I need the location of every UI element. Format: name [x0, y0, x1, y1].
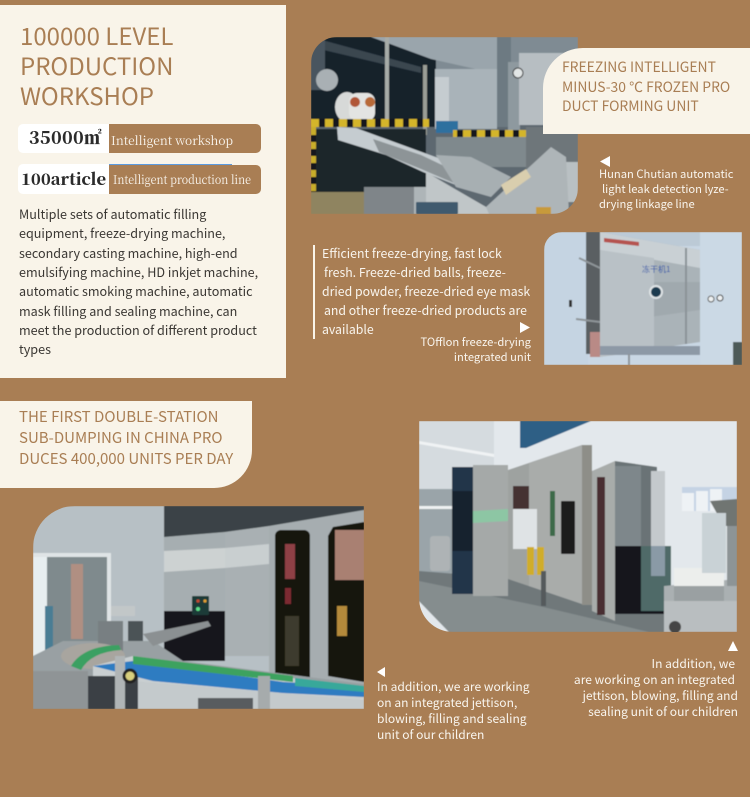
caption: integrated jettison unit right: [574, 655, 738, 720]
text block: efficient freeze-drying: fresh. Freeze-dried balls, freeze-: [324, 263, 506, 281]
caption: integrated jettison unit right: jettison, blowing, filling and: [583, 687, 738, 704]
heading: 100000 level production workshop: [20, 17, 173, 112]
callout: first double-station sub-dumping: [0, 401, 252, 488]
caption: Tofflon integrated unit: integrated unit: [454, 349, 531, 365]
caption: Hunan Chutian linkage line: [599, 166, 734, 212]
callout: first double-station sub-dumping: DUCES 400,000 UNITS PER DAY: [19, 448, 233, 469]
stat badge: 35000 m2 intelligent workshop: [18, 124, 261, 153]
stat badge: 35000 m2 intelligent workshop: 35000㎡: [29, 125, 102, 150]
callout: first double-station sub-dumping: SUB-DUMPING IN CHINA PRO: [19, 427, 223, 448]
text block: efficient freeze-drying: available: [322, 320, 374, 338]
photo: double-station production line: [33, 506, 364, 709]
text block: workshop description: Multiple sets of automatic filling: [19, 204, 206, 223]
caption: integrated jettison unit right: In addition, we: [652, 655, 735, 672]
text block: workshop description: types: [19, 339, 51, 358]
heading: 100000 level production workshop: PRODUCTION: [20, 47, 173, 82]
caption: Tofflon integrated unit: [420, 334, 531, 365]
icon: up arrow: [728, 641, 738, 651]
icon: right arrow: [520, 322, 530, 333]
divider bar: [313, 245, 315, 339]
text block: efficient freeze-drying: and other freeze-dried products are: [324, 301, 527, 319]
text block: workshop description: meet the production of different product: [19, 320, 257, 339]
caption: integrated jettison unit left: unit of our children: [377, 726, 484, 743]
text block: workshop description: secondary casting machine, high-end: [19, 243, 238, 262]
photo: integrated filling unit: [419, 421, 737, 632]
caption: Hunan Chutian linkage line: drying linkage line: [599, 196, 695, 212]
callout: freezing intelligent unit: MINUS-30 ℃ FROZEN PRO: [562, 77, 730, 97]
stat badge: 35000 m2 intelligent workshop: Intelligent workshop: [111, 132, 233, 149]
caption: integrated jettison unit right: are working on an integrated: [574, 671, 735, 688]
stat badge: 100 article intelligent production line: [18, 164, 261, 194]
caption: integrated jettison unit right: sealing unit of our children: [588, 703, 738, 720]
panel: production workshop: [0, 5, 286, 378]
heading: 100000 level production workshop: WORKSHOP: [20, 77, 154, 112]
caption: integrated jettison unit left: [377, 678, 530, 743]
photo: light leak detection linkage line: [311, 37, 578, 214]
text block: efficient freeze-drying: [322, 244, 530, 338]
caption: integrated jettison unit left: blowing, filling and sealing: [377, 710, 527, 727]
caption: Hunan Chutian linkage line: light leak detection lyze-: [602, 181, 729, 197]
caption: Hunan Chutian linkage line: Hunan Chutian automatic: [599, 166, 733, 182]
stat badge: 100 article intelligent production line: 100article: [21, 166, 106, 190]
callout: freezing intelligent unit: [543, 48, 750, 134]
heading: 100000 level production workshop: 100000 LEVEL: [20, 17, 173, 52]
caption: integrated jettison unit left: In addition, we are working: [377, 678, 530, 695]
text block: workshop description: emulsifying machine, HD inkjet machine,: [19, 262, 258, 281]
text block: workshop description: equipment, freeze-drying machine,: [19, 223, 225, 242]
icon: left arrow: [377, 667, 385, 677]
text block: efficient freeze-drying: dried powder, freeze-dried eye mask: [322, 282, 530, 300]
caption: Tofflon integrated unit: TOfflon freeze-drying: [421, 334, 531, 350]
photo: freeze-drying unit: 冻干机1: [642, 264, 670, 275]
icon: left arrow: [600, 156, 610, 167]
callout: first double-station sub-dumping: THE FIRST DOUBLE-STATION: [19, 406, 219, 427]
callout: freezing intelligent unit: FREEZING INTELLIGENT: [562, 57, 716, 77]
text block: workshop description: automatic smoking machine, automatic: [19, 281, 253, 300]
stat badge: 100 article intelligent production line: Intelligent production line: [113, 171, 251, 188]
text block: efficient freeze-drying: Efficient freeze-drying, fast lock: [322, 244, 502, 262]
callout: freezing intelligent unit: DUCT FORMING UNIT: [562, 96, 699, 116]
photo: freeze-drying unit: [544, 232, 742, 365]
text block: workshop description: [19, 204, 258, 358]
text block: workshop description: mask filling and sealing machine, can: [19, 300, 237, 320]
caption: integrated jettison unit left: on an integrated jettison,: [377, 694, 517, 711]
